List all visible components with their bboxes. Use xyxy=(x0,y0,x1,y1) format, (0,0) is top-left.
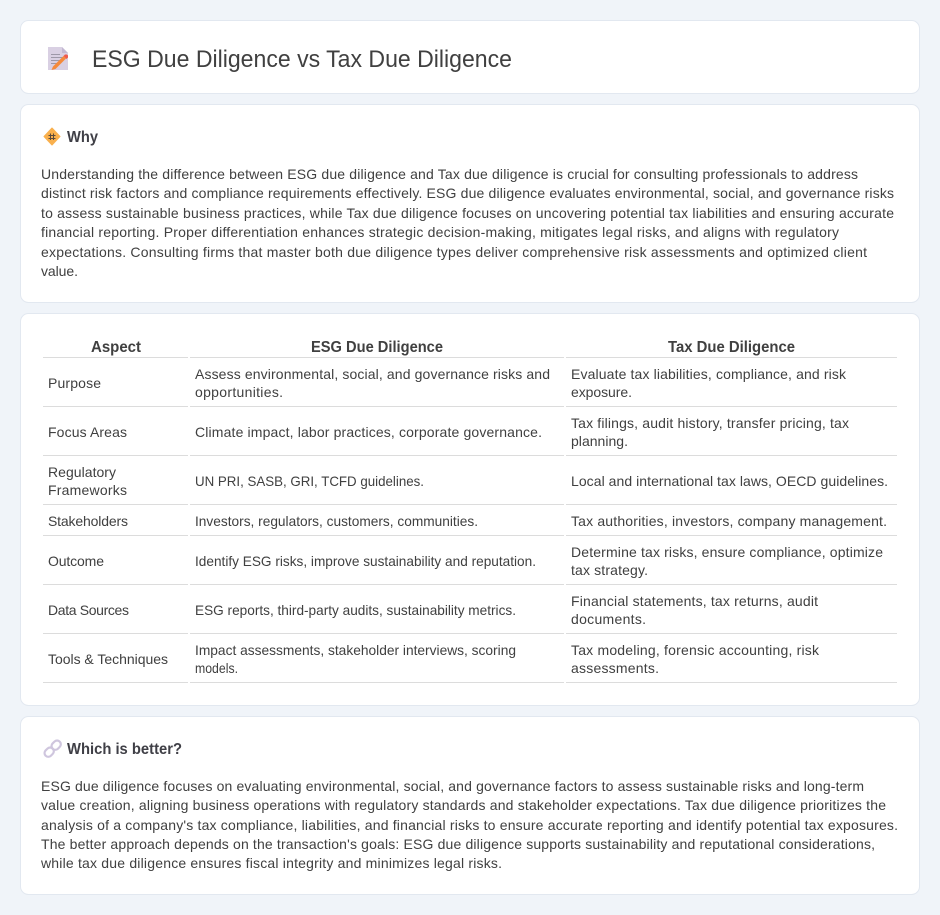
row: stakeholders xyxy=(48,513,887,529)
text block: why: financial reporting. Proper differentiation enhances strategic decision-making, mitigates legal risks, and aligns with regulatory xyxy=(41,224,839,240)
icon: document with pencil xyxy=(48,47,68,70)
text block: why: to assess sustainable business practices, while Tax due diligence focuses on uncovering potential tax liabilities and ensuring accurate xyxy=(41,205,894,221)
row: tools and techniques: Impact assessments, stakeholder interviews, scoring xyxy=(195,642,516,658)
text block: which is better: The better approach depends on the transaction's goals: ESG due diligence supports sustainability and reputational considerations, xyxy=(41,836,875,852)
row: tools and techniques: models. xyxy=(195,660,238,676)
row: purpose: Assess environmental, social, and governance risks and xyxy=(195,366,550,382)
text block: why: Understanding the difference between ESG due diligence and Tax due diligence is crucial for consulting professionals to address xyxy=(41,166,858,182)
icon: chain link xyxy=(43,739,62,758)
row: purpose: exposure. xyxy=(571,384,632,400)
row: regulatory frameworks: Frameworks xyxy=(48,482,127,498)
text block: why xyxy=(41,166,894,279)
row: stakeholders: Investors, regulators, customers, communities. xyxy=(195,513,478,529)
row: regulatory frameworks: Regulatory xyxy=(48,464,116,480)
row: purpose: Purpose xyxy=(48,375,101,391)
heading: which is better: Which is better? xyxy=(67,741,182,758)
table header row: Aspect xyxy=(91,339,142,356)
text block: why: distinct risk factors and compliance requirements effectively. ESG due diligence evaluates environmental, social, and governance risks xyxy=(41,185,894,201)
text block: which is better: value creation, aligning business operations with regulatory standards and stakeholder expectations. Tax due diligence prioritizes the xyxy=(41,797,886,813)
text block: why: expectations. Consulting firms that master both due diligence types deliver comprehensive risk assessments and optimized client xyxy=(41,244,867,260)
row: focus areas: Tax filings, audit history, transfer pricing, tax xyxy=(571,415,849,431)
row: focus areas: Focus Areas xyxy=(48,424,127,440)
row: outcome: Determine tax risks, ensure compliance, optimize xyxy=(571,544,883,560)
panel: title header xyxy=(20,20,920,94)
icon: warning diamond xyxy=(44,128,60,145)
text block: which is better xyxy=(40,778,898,871)
title: ESG Due Diligence vs Tax Due Diligence xyxy=(92,46,512,73)
row: data sources: documents. xyxy=(571,611,646,627)
text block: which is better: analysis of a company's tax compliance, liabilities, and financial risks to ensure accurate reporting and identify potential tax exposures. xyxy=(41,817,898,833)
row: tools and techniques: Tools & Techniques xyxy=(48,651,168,667)
row: outcome xyxy=(48,544,883,578)
text block: which is better: while tax due diligence ensures fiscal integrity and minimizes legal risks. xyxy=(40,855,502,871)
row: regulatory frameworks xyxy=(48,464,888,498)
row: stakeholders: Stakeholders xyxy=(48,513,128,529)
row: regulatory frameworks: UN PRI, SASB, GRI, TCFD guidelines. xyxy=(195,473,424,489)
text block: why: value. xyxy=(41,263,78,279)
table header row: ESG Due Diligence xyxy=(311,339,443,356)
row: regulatory frameworks: Local and international tax laws, OECD guidelines. xyxy=(571,473,888,489)
row: data sources: ESG reports, third-party audits, sustainability metrics. xyxy=(195,602,516,618)
row: data sources: Data Sources xyxy=(48,602,129,618)
text block: which is better: ESG due diligence focuses on evaluating environmental, social, and governance factors to assess sustainable risks and long-term xyxy=(41,778,864,794)
table header row: Tax Due Diligence xyxy=(668,339,795,356)
row: tools and techniques: assessments. xyxy=(571,660,659,676)
panel: which is better xyxy=(20,716,920,894)
row: outcome: Outcome xyxy=(48,553,104,569)
row: outcome: tax strategy. xyxy=(571,562,648,578)
row: tools and techniques: Tax modeling, forensic accounting, risk xyxy=(571,642,820,658)
heading: why: Why xyxy=(67,129,98,146)
row: purpose: opportunities. xyxy=(195,384,283,400)
row: data sources xyxy=(48,593,818,627)
row: data sources: Financial statements, tax returns, audit xyxy=(571,593,818,609)
row: purpose: Evaluate tax liabilities, compliance, and risk xyxy=(571,366,847,382)
row: tools and techniques xyxy=(48,642,820,676)
table header row xyxy=(91,339,795,356)
row: focus areas: planning. xyxy=(571,433,628,449)
row: focus areas: Climate impact, labor practices, corporate governance. xyxy=(195,424,542,440)
row: outcome: Identify ESG risks, improve sustainability and reputation. xyxy=(195,553,536,569)
panel: comparison table xyxy=(20,314,920,706)
row: focus areas xyxy=(48,415,849,449)
row: stakeholders: Tax authorities, investors, company management. xyxy=(571,513,887,529)
row: purpose xyxy=(48,366,847,400)
panel: why xyxy=(20,104,920,302)
